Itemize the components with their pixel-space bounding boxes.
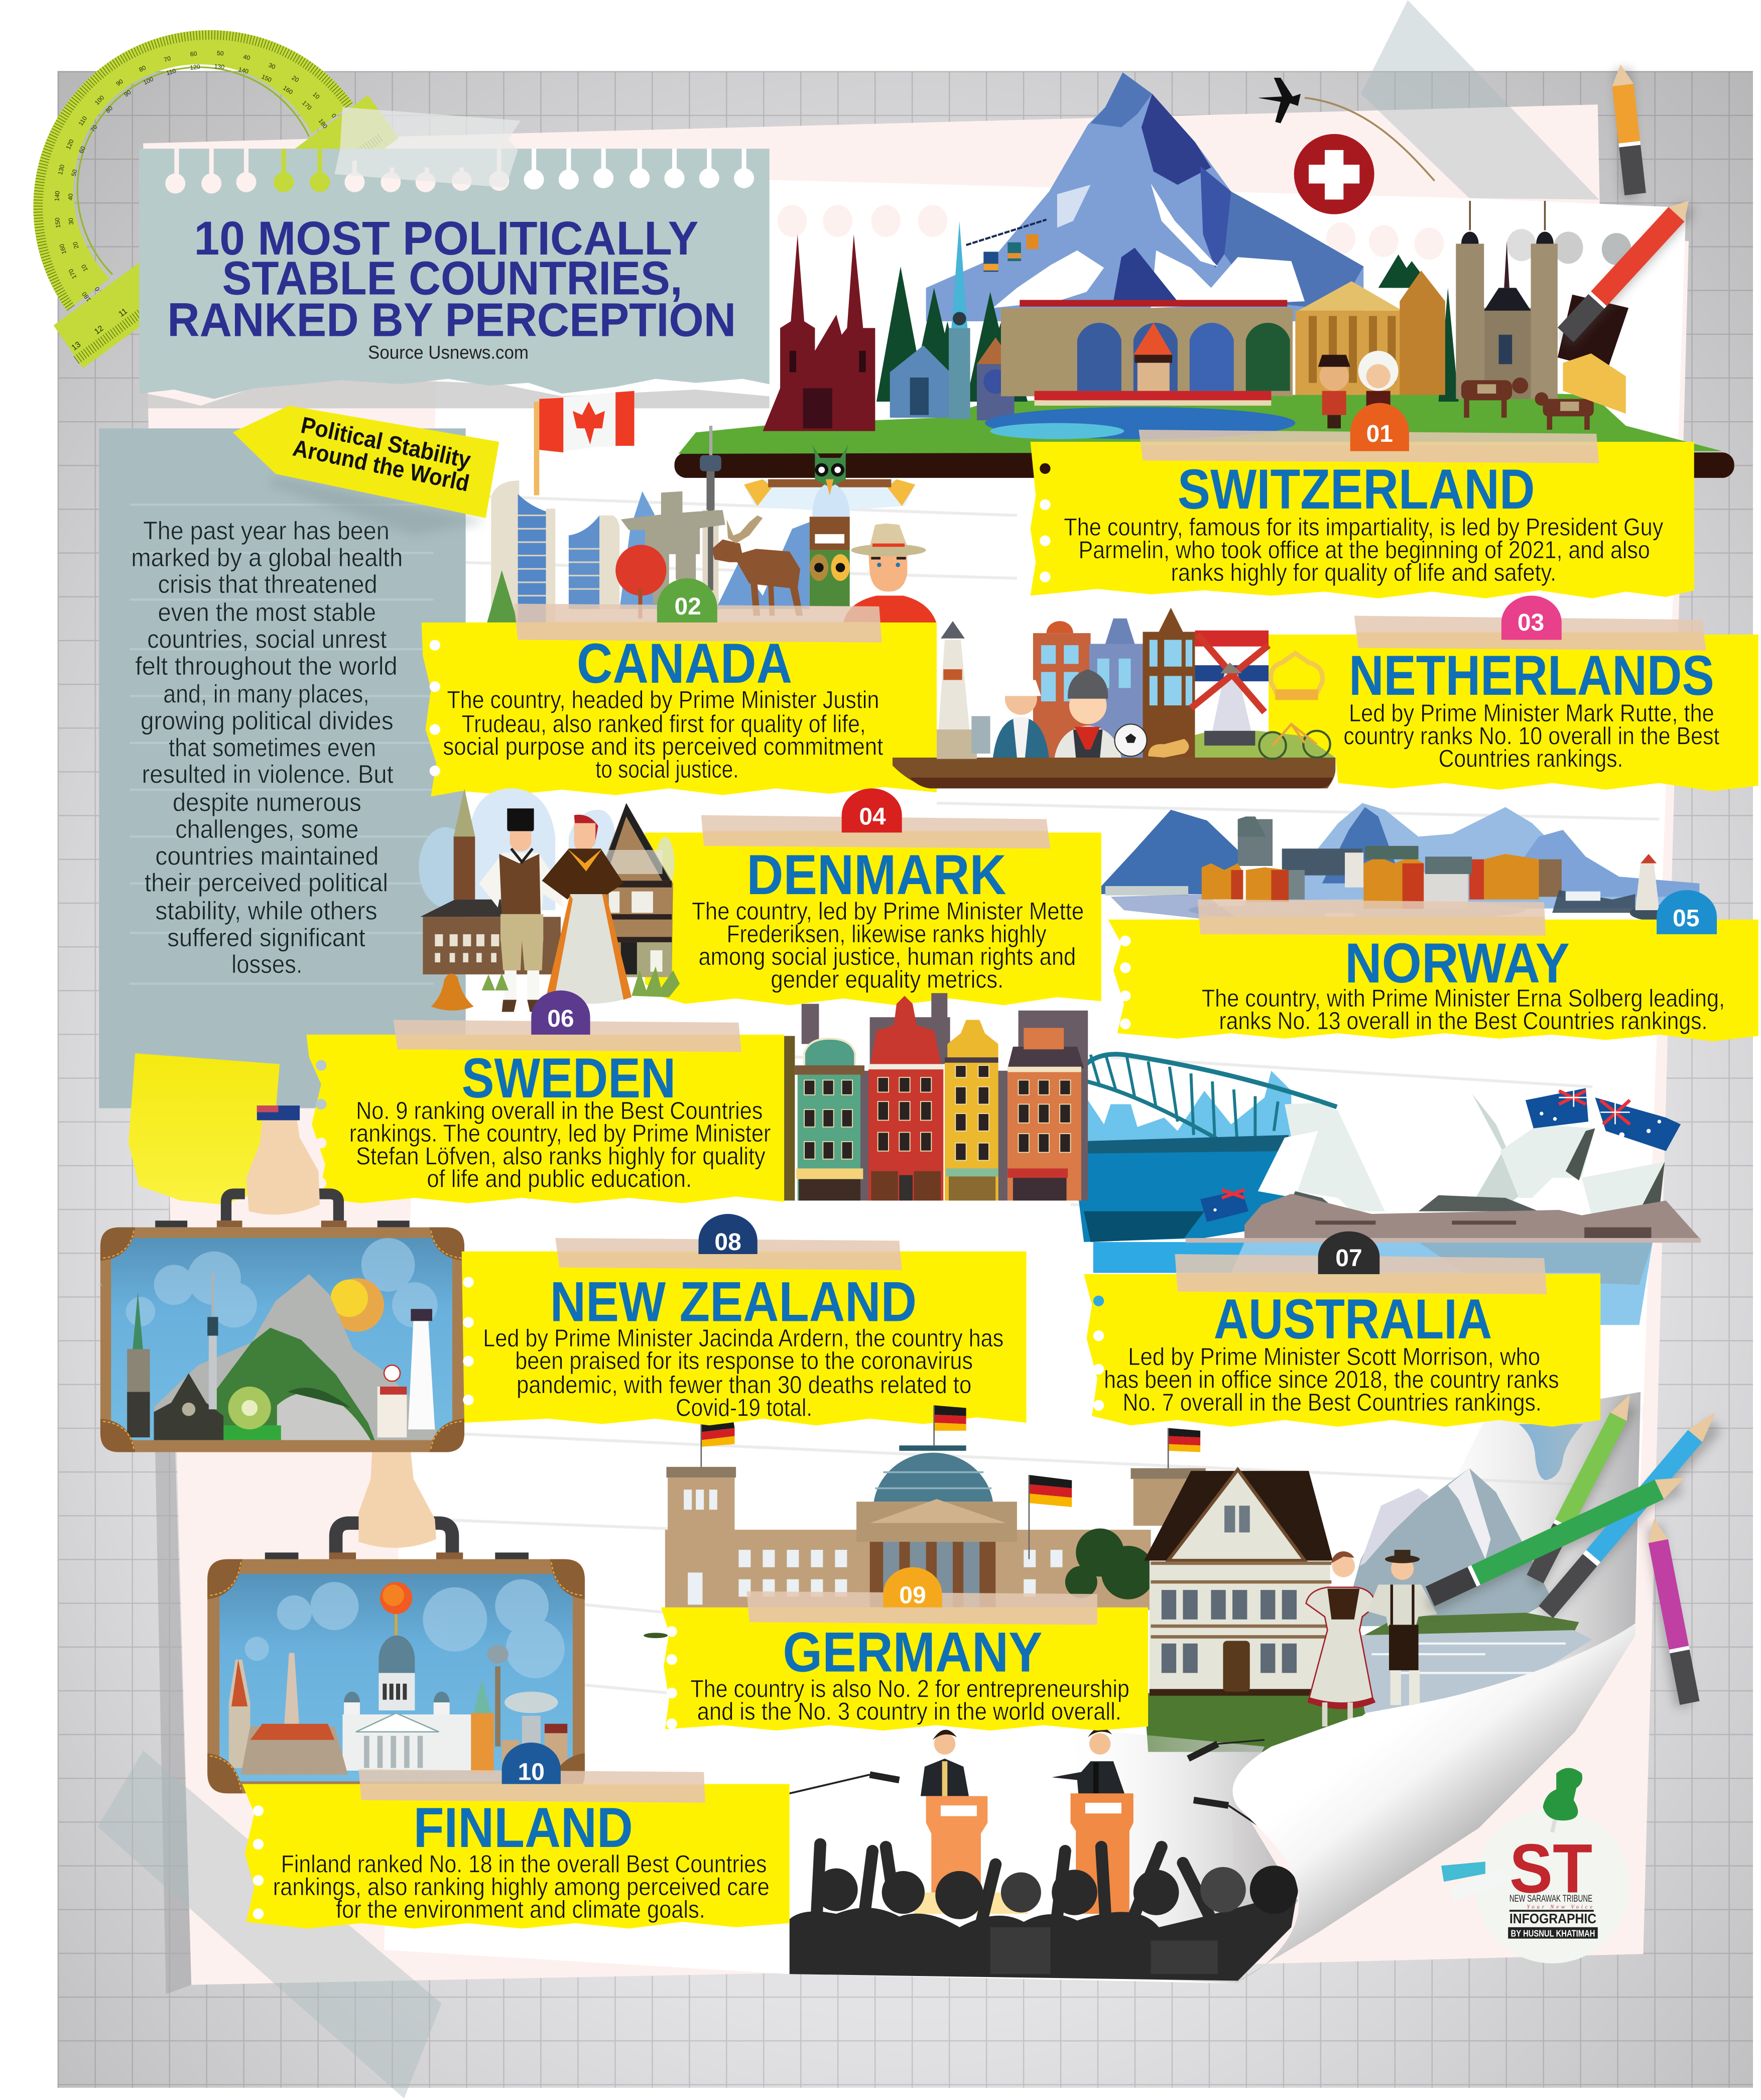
tape and badge 04	[701, 788, 1051, 848]
text: Switzerland: Parmelin, who took office at the beginning of 2021, and also	[1079, 536, 1650, 564]
text: New Zealand: Covid-19 total.	[676, 1394, 812, 1422]
tape and badge 07	[1175, 1231, 1547, 1294]
tape and badge 07: 07	[1335, 1245, 1362, 1272]
text: Denmark	[692, 898, 1084, 994]
Reichstag	[665, 1445, 1206, 1610]
logo: New Sarawak Tribune sticker: NEW SARAWAK TRIBUNE	[1510, 1894, 1592, 1904]
protractor scale numbers: 70	[163, 55, 172, 63]
logo: New Sarawak Tribune sticker: ST	[1510, 1830, 1592, 1908]
grass tufts	[482, 966, 680, 997]
panel: Germany card	[644, 1567, 1148, 1731]
green island and shelf	[674, 391, 1734, 478]
intro paragraph: challenges, some	[175, 815, 358, 843]
intro paragraph: suffered significant	[167, 923, 365, 952]
heading: Australia: AUSTRALIA	[1214, 1288, 1492, 1350]
mountie	[843, 524, 937, 624]
heading: title: 10 MOST POLITICALLY	[194, 212, 698, 265]
heading: Netherlands: NETHERLANDS	[1349, 644, 1714, 707]
opera house base	[1244, 1194, 1699, 1238]
text: Sweden: Stefan Löfven, also ranks highly for quality	[356, 1142, 766, 1170]
yellow house	[945, 1020, 998, 1200]
text: Netherlands: Countries rankings.	[1439, 745, 1623, 773]
intro paragraph: marked by a global health	[131, 543, 403, 572]
tape and badge 02	[514, 578, 882, 643]
mountains	[1342, 1468, 1592, 1713]
panel: title card	[139, 149, 770, 408]
text: Netherlands: Led by Prime Minister Mark Rutte, the	[1349, 699, 1714, 727]
red house	[868, 996, 943, 1200]
tape and badge 01	[1139, 403, 1599, 463]
protractor scale numbers: 50	[216, 50, 224, 57]
Norwegian lighthouse and quay	[1218, 854, 1683, 921]
tape and badge 05: 05	[1673, 905, 1699, 932]
illustration: Australia	[1067, 1053, 1701, 1480]
totem pole	[744, 444, 915, 606]
heading: title: RANKED BY PERCEPTION	[167, 293, 736, 346]
illustration: suitcase Finland	[207, 1452, 585, 1793]
intro paragraph: The past year has been	[143, 517, 390, 545]
text: Denmark: among social justice, human rights and	[698, 943, 1076, 970]
chocolate and cheese	[1558, 295, 1628, 414]
protractor scale numbers: 180	[80, 291, 92, 303]
harbour water	[1072, 1144, 1289, 1242]
pencil shadows	[1429, 70, 1715, 1706]
text: Finland: rankings, also ranking highly among perceived care	[273, 1873, 770, 1901]
Finnish towers	[229, 1645, 567, 1775]
text: Australia: Led by Prime Minister Scott Morrison, who	[1128, 1343, 1540, 1371]
crowd silhouettes	[790, 1844, 1299, 1981]
illustration: Sweden	[784, 993, 1088, 1200]
text: Denmark: Frederiksen, likewise ranks highly	[726, 920, 1047, 948]
tape and badge 10: 10	[518, 1759, 545, 1786]
flag and windmill	[1191, 631, 1269, 746]
tape and badge 03	[1354, 596, 1706, 651]
town hall	[420, 788, 561, 974]
protractor scale numbers: 170	[67, 268, 78, 280]
protractor scale numbers: 10	[80, 263, 89, 273]
German flags on Reichstag	[701, 1420, 1200, 1559]
protractor scale numbers: 20	[291, 74, 300, 84]
microphones	[790, 1740, 1281, 1840]
panel: Canada card	[422, 578, 937, 796]
tape and badge 08: 08	[714, 1229, 741, 1256]
protractor scale numbers: 180	[317, 117, 329, 130]
light floor strip	[914, 1893, 1028, 1914]
red maple	[615, 545, 666, 619]
protractor scale numbers: 120	[65, 138, 75, 151]
protractor: 12	[93, 324, 105, 336]
Danish woman	[542, 815, 632, 1004]
text: Netherlands	[1343, 699, 1720, 773]
Danish man	[479, 808, 563, 1012]
text: Sweden: of life and public education.	[427, 1165, 692, 1193]
panel: Norway card	[1108, 890, 1758, 1041]
curl underside shade	[1057, 1726, 1298, 1984]
bridge deck	[1067, 1135, 1289, 1154]
tape and badge 09	[746, 1567, 1097, 1625]
Reichstag windows	[684, 1490, 1063, 1604]
dutch couple	[993, 669, 1121, 758]
logo: New Sarawak Tribune sticker: BY HUSNUL KHATIMAH	[1511, 1928, 1595, 1938]
protractor scale numbers: 160	[282, 84, 294, 96]
arrow label: Political Stability	[233, 406, 499, 536]
golden temple	[1295, 271, 1445, 395]
heading: Switzerland: SWITZERLAND	[1178, 458, 1535, 521]
lake and red bridge	[985, 391, 1295, 439]
blue mountains	[619, 491, 810, 609]
half-timbered German house	[1144, 1469, 1333, 1696]
Helsinki cathedral	[342, 1582, 471, 1771]
green drawing pencil one	[1527, 1390, 1638, 1583]
wooden platform	[893, 758, 1335, 788]
skyline behind bridge	[1088, 1071, 1291, 1144]
text: Germany: The country is also No. 2 for entrepreneurship	[690, 1675, 1129, 1702]
intro paragraph: resulted in violence. But	[142, 760, 394, 789]
arrow label: Political Stability: Around the World	[291, 434, 471, 497]
title card spiral holes	[165, 149, 754, 193]
protractor scale numbers: 130	[214, 63, 225, 71]
tape and badge 04: 04	[859, 803, 886, 830]
text: New Zealand: been praised for its response to the coronavirus	[515, 1347, 973, 1375]
panel: Finland card	[242, 1743, 790, 1929]
white sheet	[384, 171, 1686, 1984]
text: Sweden: rankings. The country, led by Prime Minister	[349, 1120, 771, 1147]
protractor scale numbers: 110	[165, 67, 177, 77]
text: Australia: No. 7 overall in the Best Countries rankings.	[1122, 1389, 1542, 1416]
intro paragraph: stability, while others	[155, 897, 378, 925]
protractor scale numbers: 80	[138, 64, 147, 73]
children	[1318, 351, 1399, 428]
text: Finland: Finland ranked No. 18 in the overall Best Countries	[281, 1850, 767, 1878]
text: Switzerland	[1064, 514, 1664, 586]
heading: Denmark: DENMARK	[746, 843, 1007, 906]
text: Germany	[690, 1675, 1129, 1725]
text: Sweden	[349, 1097, 771, 1193]
text: Canada: The country, headed by Prime Minister Justin	[447, 686, 879, 713]
intro paragraph: even the most stable	[158, 598, 376, 627]
tape and badge 08	[555, 1214, 902, 1270]
crown and bicycle	[1259, 653, 1330, 759]
Bergen pier	[1105, 886, 1526, 924]
opera house sails	[1258, 1084, 1665, 1218]
tape and badge 03: 03	[1518, 609, 1544, 636]
intro paragraph: crisis that threatened	[158, 570, 378, 598]
heading: Finland: FINLAND	[414, 1796, 633, 1859]
protractor scale numbers: 60	[77, 145, 87, 154]
hand carrying suitcase	[155, 1105, 410, 1227]
protractor scale numbers: 90	[122, 88, 133, 98]
bottom left tape	[98, 1751, 442, 2098]
panel: Switzerland card	[1031, 403, 1694, 598]
text: Germany: and is the No. 3 country in the world overall.	[697, 1698, 1121, 1725]
hand carrying suitcase Finland	[265, 1452, 529, 1560]
lighthouse	[937, 621, 977, 759]
protractor scale numbers: 70	[89, 123, 99, 133]
intro paragraph: their perceived political	[145, 869, 388, 897]
harbour bridge	[1075, 1053, 1337, 1151]
Bavarian couple	[1306, 1550, 1437, 1726]
Grossmunster cathedral	[1456, 201, 1558, 399]
ground	[1144, 1693, 1392, 1752]
protractor scale numbers: 50	[70, 169, 78, 177]
text: Sweden: No. 9 ranking overall in the Best Countries	[356, 1097, 763, 1125]
protractor scale numbers: 60	[190, 50, 197, 58]
tape and badge 01: 01	[1366, 421, 1393, 447]
protractor scale numbers: 40	[242, 53, 251, 62]
mountain	[926, 72, 1363, 321]
illustration: Norway	[1101, 803, 1699, 924]
suitcase corners	[100, 1227, 464, 1452]
blue drawing pencil	[1539, 1406, 1723, 1618]
green drawing pencil two	[1426, 1468, 1689, 1606]
airplane	[1258, 78, 1435, 181]
NZ clouds	[99, 1238, 438, 1328]
logo: New Sarawak Tribune sticker	[1441, 1768, 1630, 1963]
clouds	[245, 1579, 565, 1678]
source line: Source Usnews.com	[368, 342, 529, 363]
panel: Australia card	[1084, 1231, 1600, 1427]
viking helmet	[431, 973, 474, 1011]
cows	[1461, 378, 1594, 430]
back silhouettes and chimneys	[802, 993, 1088, 1200]
illustration: Germany	[665, 1392, 1641, 1752]
background bubbles	[419, 788, 674, 910]
arrow label: Political Stability: Political Stability	[299, 412, 473, 473]
intro paragraph: and, in many places,	[163, 680, 369, 708]
protractor scale numbers: 80	[104, 104, 114, 114]
heading: Norway: NORWAY	[1345, 932, 1570, 995]
half-timbered house	[595, 803, 673, 977]
heading: title: STABLE COUNTRIES,	[222, 252, 682, 305]
heading: title	[167, 212, 736, 346]
protractor scale numbers: 120	[190, 63, 201, 71]
paper ruled lines	[422, 496, 1659, 1693]
curling page flap	[1233, 1624, 1635, 1984]
text: New Zealand	[483, 1324, 1003, 1422]
text: Denmark: gender equality metrics.	[771, 966, 1003, 994]
orange house	[1008, 1028, 1084, 1200]
protractor scale numbers: 0	[330, 112, 338, 119]
tape and badge 09: 09	[899, 1582, 926, 1609]
text: Canada: Trudeau, also ranked first for quality of life,	[462, 710, 866, 737]
intro paragraph	[131, 517, 403, 978]
protractor: 11	[117, 307, 129, 319]
inukshuk	[621, 491, 725, 604]
intro paragraph: countries maintained	[155, 841, 379, 870]
clear tape over protractor	[334, 107, 521, 187]
Swiss flag badge	[1294, 134, 1374, 214]
panel: Sweden card	[306, 991, 784, 1203]
protractor scale numbers: 150	[261, 73, 273, 84]
panel: Netherlands card	[1269, 596, 1758, 791]
green mound	[1135, 731, 1335, 758]
page edge shade	[1392, 1392, 1641, 1689]
protractor scale numbers: 170	[301, 99, 313, 111]
text: Australia	[1104, 1343, 1559, 1416]
green bush	[1065, 1528, 1155, 1599]
heading: Germany: GERMANY	[783, 1621, 1043, 1684]
protractor scale numbers: 90	[115, 78, 124, 87]
protractor scale numbers: 140	[237, 66, 249, 75]
punched holes on sheet	[778, 205, 1631, 265]
protractor scale numbers: 30	[67, 217, 75, 225]
protractor scale numbers: 130	[57, 164, 66, 176]
viaduct	[1001, 300, 1293, 396]
moose	[712, 516, 803, 615]
NZ sun	[330, 1278, 384, 1332]
water drip	[1519, 1424, 1583, 1480]
logo tape	[1441, 1862, 1508, 1902]
protractor scale numbers	[0, 0, 340, 303]
protractor scale numbers: 100	[142, 75, 155, 86]
panel: Denmark card	[645, 788, 1101, 1005]
intro paragraph: growing political divides	[141, 706, 394, 735]
protractor scale numbers: 10	[311, 91, 321, 100]
Canadian flag	[534, 391, 635, 496]
protractor scale numbers: 150	[54, 217, 62, 228]
text: Switzerland: ranks highly for quality of life and safety.	[1171, 559, 1556, 586]
intro paragraph: countries, social unrest	[147, 625, 387, 653]
Bergen houses	[1202, 816, 1562, 909]
NZ mountains	[155, 1274, 438, 1440]
tape and badge 10	[358, 1743, 705, 1803]
protractor scale numbers: 0	[93, 285, 101, 292]
suitcase corners Finland	[207, 1559, 585, 1793]
tape and badge 06	[394, 991, 741, 1052]
text: New Zealand: Led by Prime Minister Jacinda Ardern, the country has	[483, 1324, 1003, 1352]
protractor scale numbers: 110	[77, 115, 88, 127]
protractor scale numbers: 40	[67, 193, 74, 201]
sticky note	[129, 1053, 280, 1204]
German flag over New Zealand card	[934, 1405, 966, 1445]
protractor scale numbers: 30	[268, 61, 277, 71]
green push pin	[1543, 1768, 1582, 1832]
heading: Canada: CANADA	[577, 632, 792, 695]
city hall towers	[491, 480, 619, 623]
illustration: suitcase New Zealand	[99, 1105, 464, 1452]
top tape right	[1361, 0, 1599, 199]
text: Finland: for the environment and climate goals.	[336, 1896, 705, 1923]
magenta pencil	[1644, 1517, 1700, 1705]
heading: Sweden: SWEDEN	[462, 1047, 676, 1109]
left sheet shadow	[155, 1452, 191, 1994]
intro paragraph: that sometimes even	[169, 733, 376, 762]
panel: intro text	[99, 428, 466, 1108]
protractor scale numbers: 160	[58, 243, 68, 255]
red pencil	[1558, 194, 1697, 342]
text: Switzerland: The country, famous for its impartiality, is led by President Guy	[1064, 514, 1664, 541]
cable cars	[966, 219, 1047, 272]
blue church and clock towers	[890, 221, 1015, 420]
green house	[795, 1039, 864, 1200]
pink back sheet	[143, 104, 1689, 1985]
tree and cn tower	[487, 426, 721, 623]
Swedish house windows	[804, 1065, 1071, 1160]
text: Norway	[1202, 984, 1725, 1035]
text: Canada: social purpose and its perceived commitment	[443, 733, 884, 761]
intro paragraph: losses.	[231, 950, 302, 978]
logo: New Sarawak Tribune sticker: Your New Voice	[1527, 1905, 1592, 1910]
canal houses	[1033, 608, 1195, 758]
protractor scale numbers: 20	[71, 241, 80, 250]
text: Canada	[443, 686, 884, 783]
logo: New Sarawak Tribune sticker: INFOGRAPHIC	[1510, 1911, 1596, 1926]
protractor scale numbers: 100	[93, 94, 105, 106]
speakers at podiums	[921, 1727, 1134, 1914]
intro paragraph: despite numerous	[173, 788, 361, 817]
text: New Zealand: pandemic, with fewer than 30 deaths related to	[517, 1371, 971, 1399]
Australian flags	[1200, 1088, 1681, 1222]
intro paragraph: felt throughout the world	[135, 652, 398, 680]
panel: New Zealand card	[462, 1214, 1027, 1425]
soccer ball and clogs	[971, 716, 1189, 758]
NZ buildings	[127, 1273, 435, 1440]
protractor: 13	[70, 340, 82, 352]
illustration: Canada	[487, 391, 937, 624]
protractor scale numbers: 140	[53, 191, 61, 201]
fir trees	[876, 255, 1459, 402]
orange pencil	[1610, 63, 1646, 195]
protractor	[0, 0, 399, 368]
illustration: political debate	[790, 1726, 1299, 1984]
tape and badge 06: 06	[547, 1006, 574, 1032]
red cathedral	[763, 234, 875, 431]
illustration: Netherlands	[893, 608, 1335, 788]
tape and badge 02: 02	[674, 593, 701, 620]
text: Canada: to social justice.	[595, 756, 738, 783]
illustration: Denmark	[419, 788, 680, 1012]
illustration: Switzerland	[674, 72, 1734, 478]
text: Finland	[273, 1850, 770, 1923]
text: Australia: has been in office since 2018, the country ranks	[1104, 1366, 1559, 1394]
heading: New Zealand: NEW ZEALAND	[550, 1270, 917, 1333]
text: Denmark: The country, led by Prime Minister Mette	[692, 898, 1084, 925]
tape and badge 05	[1198, 890, 1717, 936]
